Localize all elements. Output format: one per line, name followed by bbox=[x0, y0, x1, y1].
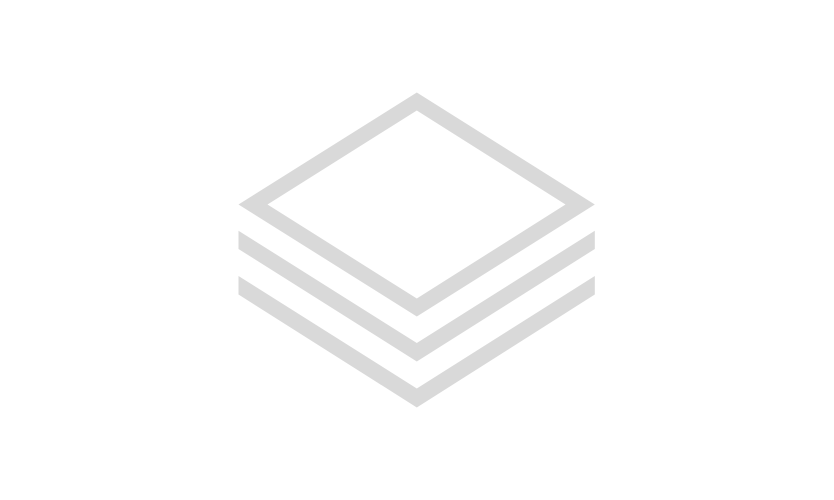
icon: top diamond layer bbox=[238, 92, 595, 316]
icon: bottom chevron layer bbox=[238, 276, 595, 408]
icon: middle chevron layer bbox=[238, 231, 595, 362]
